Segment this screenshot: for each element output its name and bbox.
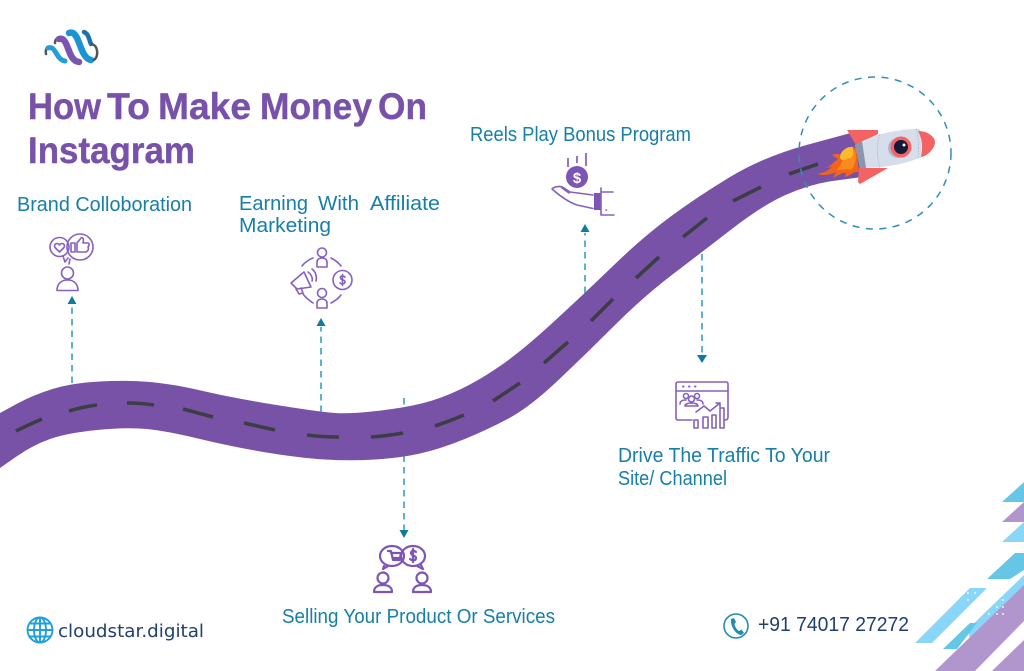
road centre dashes [16,164,818,437]
icon: browser with analytics [676,382,728,428]
heading: affiliate marketing: Earning [239,193,308,215]
title: On [378,86,427,127]
arrow: selling products [400,398,408,538]
arrow: reels bonus [580,224,590,293]
heading: reels bonus: Reels Play Bonus Program [470,124,691,146]
heading: affiliate marketing [239,193,440,237]
arrow: brand collaboration [68,296,76,383]
icon: like and heart bubbles with person [50,234,93,290]
nose [918,131,935,157]
icon: hand with coin: $ [573,170,582,187]
body [855,129,922,168]
icon: hand with coin [552,153,614,215]
title: How [28,86,101,127]
title: Make [158,86,251,127]
title [28,86,427,171]
dashed circle around rocket [799,77,951,229]
logo [46,32,97,62]
arrow: drive traffic [697,254,707,363]
flame [817,147,859,178]
heading: drive traffic [618,445,830,490]
heading: brand collaboration: Brand Colloboration [17,194,192,216]
heading: affiliate marketing: With [318,193,359,215]
heading: affiliate marketing: Marketing [239,215,331,237]
title: To [107,86,150,127]
window [888,138,908,158]
fins [847,130,878,145]
icon: affiliate cycle [291,248,352,308]
website: cloudstar.digital [58,621,204,642]
title: Money [260,86,372,127]
icon: phone [724,614,748,638]
heading: drive traffic: Site/ Channel [618,468,727,490]
icon: shopping and dollar bubbles [374,546,431,592]
decoration: corner shapes [915,482,1024,671]
heading: selling products: Selling Your Product Or Services [282,606,555,628]
heading: affiliate marketing: Affiliate [370,193,440,215]
road [0,131,862,468]
icon: globe [28,618,52,642]
phone number: +91 74017 27272 [758,614,909,636]
rocket [817,129,935,184]
arrow: affiliate marketing [316,318,326,412]
heading: drive traffic: Drive The Traffic To Your [618,445,830,467]
title: Instagram [28,130,195,171]
